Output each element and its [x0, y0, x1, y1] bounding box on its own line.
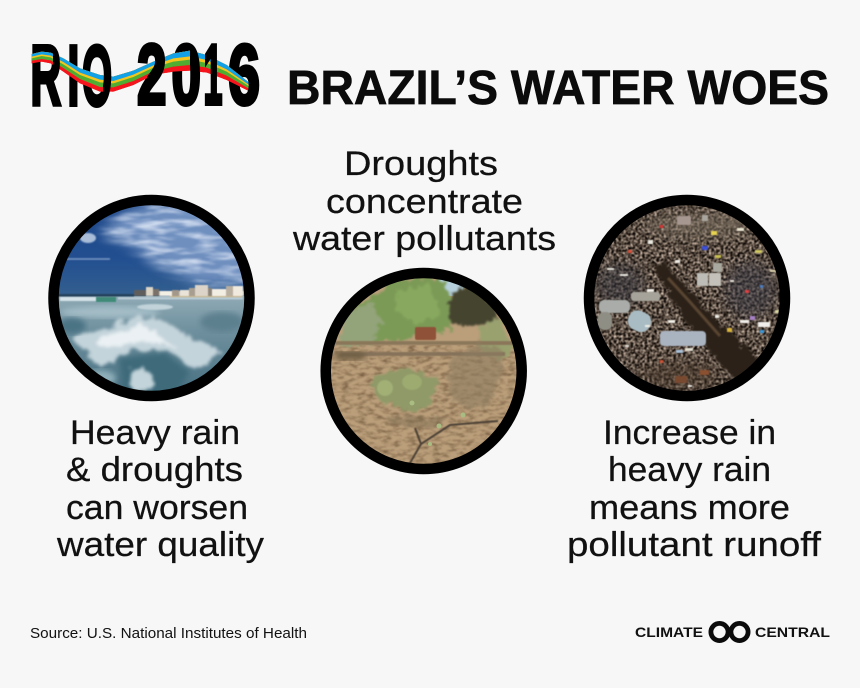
- twig: [410, 421, 498, 463]
- debris specks: [607, 225, 779, 387]
- logo: Rio 2016 with rainbow ribbon: [32, 42, 260, 108]
- text block: right caption: [567, 414, 822, 564]
- circle border: [326, 273, 522, 469]
- text block: left caption: & droughts: [66, 451, 243, 489]
- title: BRAZIL’S WATER WOES: [287, 62, 829, 115]
- logo: Climate Central: CENTRAL: [755, 625, 830, 640]
- text block: left caption: [56, 414, 264, 564]
- logo: Climate Central: CLIMATE: [635, 625, 703, 640]
- bottles: [598, 215, 722, 346]
- sky patch: [438, 278, 463, 296]
- text block: left caption: Heavy rain: [70, 414, 240, 452]
- log: [654, 262, 760, 382]
- logo text: 2: [137, 28, 166, 123]
- photo circle: Rio beach and surf: [54, 200, 250, 396]
- photo circle: drought-stricken scrubland: [325, 273, 525, 469]
- ribbon passing over letters: [32, 51, 250, 92]
- text block: left caption: can worsen: [66, 489, 248, 527]
- sea: [58, 296, 244, 388]
- photo circle: plastic pollution in water: [589, 200, 785, 396]
- logo text: R: [30, 29, 61, 124]
- logo text: 1: [204, 28, 222, 123]
- text block: right caption: Increase in: [603, 414, 776, 452]
- text block: centre caption: concentrate: [326, 183, 523, 221]
- text block: centre caption: water pollutants: [292, 220, 556, 258]
- logo: Climate Central: [635, 623, 830, 641]
- circle border: [589, 200, 785, 396]
- icon: linked rings: [711, 623, 748, 641]
- text block: right caption: means more: [589, 489, 790, 527]
- text block: centre caption: Droughts: [344, 145, 498, 183]
- circle border: [54, 200, 250, 396]
- source note: Source: U.S. National Institutes of Health: [30, 626, 307, 642]
- text block: right caption: heavy rain: [608, 451, 771, 489]
- logo text: O: [82, 29, 112, 124]
- ribbon behind letters: [32, 51, 250, 92]
- logo text: [30, 28, 260, 124]
- shrubs: [372, 342, 505, 426]
- logo text: I: [68, 29, 79, 124]
- trees: [340, 278, 512, 358]
- clouds: [100, 200, 250, 285]
- text block: left caption: water quality: [56, 526, 264, 564]
- logo text: 6: [228, 28, 260, 123]
- logo text: 0: [172, 28, 201, 123]
- text block: right caption: pollutant runoff: [567, 526, 822, 564]
- foam: [70, 316, 222, 372]
- text block: centre caption: [292, 145, 556, 258]
